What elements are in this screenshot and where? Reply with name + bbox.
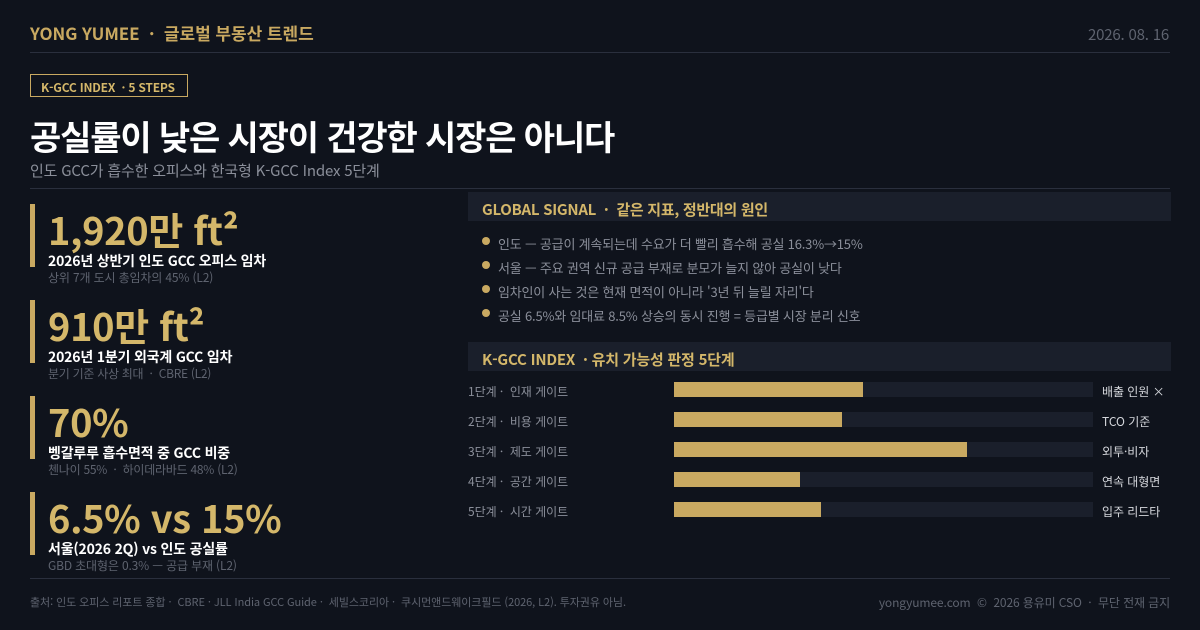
row 1: [468, 382, 1165, 400]
KPI: 910만 ft2: 분기 기준 사상 최대 · CBRE (L2): [48, 365, 211, 382]
bar chart: five gates: [468, 382, 1165, 520]
KPI: 70%: 70%: [48, 393, 128, 448]
row 4: [468, 472, 1160, 490]
date: 2026. 08. 16: [1088, 24, 1169, 44]
KPI: 1,920만 ft2: 상위 7개 도시 총임차의 45% (L2): [48, 269, 213, 286]
row 3: [468, 442, 1149, 460]
KPI: 910만 ft2: 2026년 1분기 외국계 GCC 임차: [48, 347, 232, 367]
brand header: YONG YUMEE · 글로벌 부동산 트렌드: [30, 20, 314, 45]
subtitle: 인도 GCC가 흡수한 오피스와 한국형 K-GCC Index 5단계: [30, 160, 380, 181]
section heading: global signal: [468, 192, 1171, 221]
KPI: 70%: [30, 393, 238, 478]
row 5: [468, 502, 1160, 520]
KPI: 1,920만 ft2: 2026년 상반기 인도 GCC 오피스 임차: [48, 251, 266, 271]
row 2: TCO 기준: [1102, 413, 1150, 430]
bullet list: 서울 — 주요 권역 신규 공급 부재로 분모가 늘지 않아 공실이 낮다: [498, 258, 842, 277]
tag badge: [30, 74, 188, 97]
KPI: 70%: 첸나이 55% · 하이데라바드 48% (L2): [48, 461, 238, 478]
row 3: 3단계 · 제도 게이트: [468, 443, 568, 460]
KPI: 6.5% vs 15%: [30, 489, 281, 574]
row 4: 4단계 · 공간 게이트: [468, 473, 568, 490]
KPI: 6.5% vs 15%: GBD 초대형은 0.3% — 공급 부재 (L2): [48, 557, 237, 574]
source note: 출처: 인도 오피스 리포트 종합 · CBRE · JLL India GCC Guide · 세빌스코리아 · 쿠시먼앤드웨이크필드 (2026, L2). 투자권유 아님.: [30, 594, 626, 610]
bullet list: 공실 6.5%와 임대료 8.5% 상승의 동시 진행 = 등급별 시장 분리 신호: [498, 306, 860, 325]
row 2: 2단계 · 비용 게이트: [468, 413, 568, 430]
bullet list: 임차인이 사는 것은 현재 면적이 아니라 '3년 뒤 늘릴 자리'다: [498, 282, 814, 301]
KPI: 910만 ft2: [30, 297, 232, 382]
KPI: 1,920만 ft2: [30, 201, 266, 286]
section heading: global signal: GLOBAL SIGNAL · 같은 지표, 정반대의 원인: [482, 199, 768, 220]
row 3: 외투·비자: [1102, 443, 1149, 460]
title: 공실률이 낮은 시장이 건강한 시장은 아니다: [30, 111, 614, 160]
KPI: 910만 ft2: 910만 ft²: [48, 297, 204, 352]
bullet list: [482, 234, 863, 325]
bullet list: 인도 — 공급이 계속되는데 수요가 더 빨리 흡수해 공실 16.3%→15%: [498, 234, 863, 253]
KPI: 6.5% vs 15%: 서울(2026 2Q) vs 인도 공실률: [48, 539, 228, 559]
tag badge: K-GCC INDEX · 5 STEPS: [41, 79, 175, 96]
KPI: 1,920만 ft2: 1,920만 ft²: [48, 201, 238, 256]
section heading: k-gcc index: [468, 342, 1171, 371]
KPI: 6.5% vs 15%: 6.5% vs 15%: [48, 489, 281, 544]
row 4: 연속 대형면: [1102, 473, 1160, 490]
row 5: 5단계 · 시간 게이트: [468, 503, 568, 520]
copyright: yongyumee.com © 2026 용유미 CSO · 무단 전재 금지: [879, 594, 1170, 610]
row 2: [468, 412, 1150, 430]
row 5: 입주 리드타: [1102, 503, 1160, 520]
KPI: 70%: 벵갈루루 흡수면적 중 GCC 비중: [48, 443, 230, 463]
section heading: k-gcc index: K-GCC INDEX · 유치 가능성 판정 5단계: [482, 349, 734, 370]
row 1: 1단계 · 인재 게이트: [468, 383, 568, 400]
row 1: 배출 인원 ×: [1102, 383, 1165, 400]
